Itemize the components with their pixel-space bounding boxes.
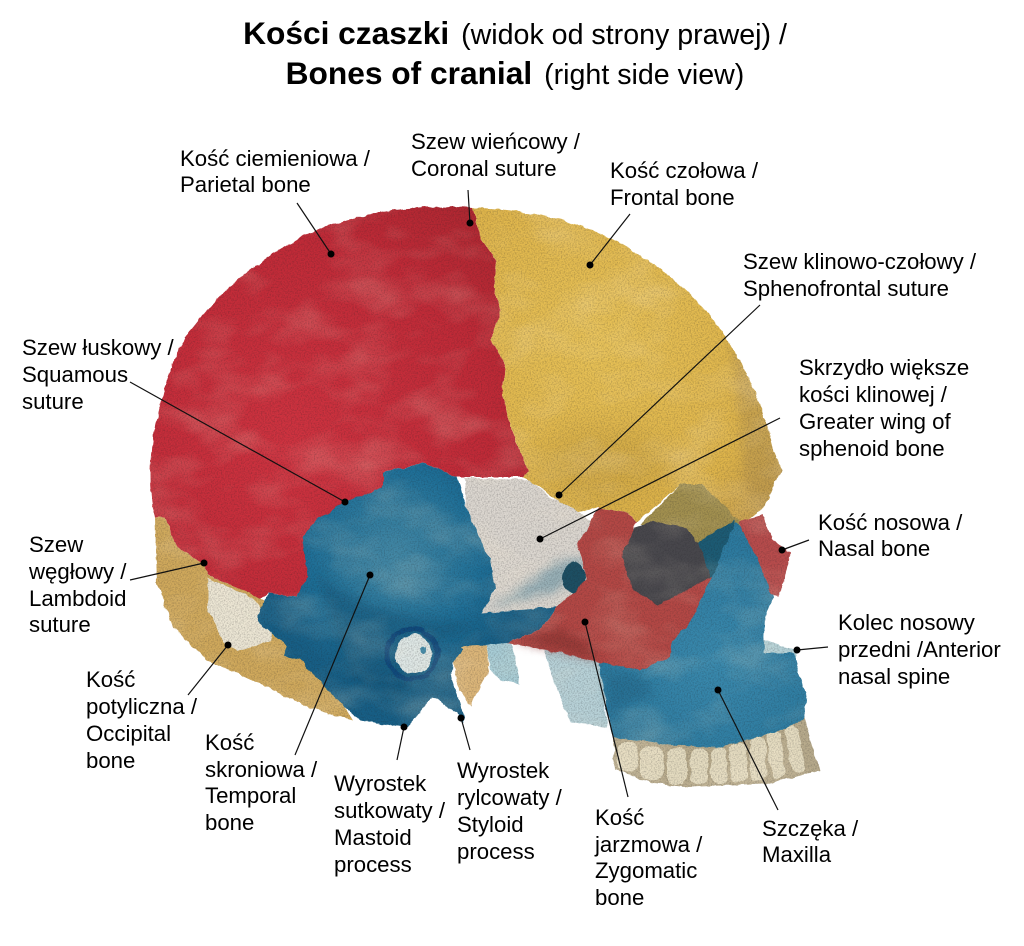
bone: pale pterygoid wedge	[543, 640, 607, 727]
bone: nasal	[738, 515, 790, 597]
label: temporal bone: Kość	[205, 730, 254, 755]
label: squamous suture: Squamous	[22, 362, 128, 387]
bone: parietal	[150, 207, 528, 600]
label: mastoid process: process	[334, 852, 412, 877]
leader: temporal bone	[295, 572, 374, 755]
label: maxilla: Szczęka /	[762, 816, 859, 841]
bone: frontal	[472, 208, 790, 525]
label: zygomatic bone: jarzmowa /	[594, 832, 703, 857]
title: Bones of cranial (right side view)	[286, 55, 744, 91]
bone: occipital	[155, 517, 353, 720]
external acoustic opening	[387, 629, 437, 679]
label: lambdoid suture: Lambdoid	[29, 586, 126, 611]
label: mastoid process: Mastoid	[334, 825, 412, 850]
bone: greater wing of sphenoid	[464, 478, 600, 625]
label: temporal bone: skroniowa /	[205, 757, 318, 782]
label: styloid process: process	[457, 839, 535, 864]
label: greater wing of sphenoid: sphenoid bone	[799, 436, 945, 461]
label: mastoid process: Wyrostek	[334, 771, 427, 796]
leader lines and dots	[130, 190, 828, 810]
leader: zygomatic bone	[582, 618, 628, 797]
nasal spine pale	[755, 637, 797, 665]
leader: parietal bone	[297, 203, 334, 258]
label: anterior nasal spine: przedni /Anterior	[838, 637, 1001, 662]
leader: squamous suture	[130, 382, 348, 506]
orbit upper tan wall	[640, 485, 745, 545]
orbit dark cavity	[610, 521, 720, 620]
leader: frontal bone	[586, 214, 630, 268]
label: nasal bone: Nasal bone	[818, 536, 930, 561]
label: temporal bone: Temporal	[205, 783, 296, 808]
label: lambdoid suture: Szew	[29, 532, 84, 557]
leader: lambdoid suture	[130, 560, 208, 580]
pale plate behind styloid	[485, 635, 520, 685]
tan fragment behind styloid	[450, 640, 489, 705]
title	[243, 15, 787, 91]
leader: greater wing	[536, 418, 780, 542]
title: Kości czaszki (widok od strony prawej) /	[243, 15, 787, 51]
label: parietal bone: Parietal bone	[180, 172, 311, 197]
skull illustration	[150, 207, 820, 787]
leader: mastoid process	[397, 724, 408, 760]
infratemporal dark spot	[562, 563, 586, 593]
label: zygomatic bone: bone	[595, 885, 644, 910]
leader: coronal suture	[466, 190, 474, 226]
bone: maxilla teeth	[613, 715, 820, 787]
orbit medial blue wall	[698, 520, 735, 585]
label: maxilla: Maxilla	[762, 842, 832, 867]
label: anterior nasal spine: Kolec nosowy	[838, 610, 976, 635]
bone: temporal	[257, 463, 557, 728]
label: sphenofrontal suture: Sphenofrontal suture	[743, 276, 949, 301]
label: occipital bone: potyliczna /	[86, 694, 198, 719]
bone: zygomatic	[507, 508, 712, 670]
label: styloid process: rylcowaty /	[457, 785, 563, 810]
label: greater wing of sphenoid: Greater wing of	[799, 409, 952, 434]
label: nasal bone: Kość nosowa /	[818, 510, 963, 535]
label: lambdoid suture: węgłowy /	[28, 559, 127, 584]
bone: maxilla	[597, 522, 807, 747]
label: anterior nasal spine: nasal spine	[838, 664, 950, 689]
leader: sphenofrontal suture	[556, 305, 760, 498]
label: occipital bone: Kość	[86, 667, 135, 692]
label: frontal bone: Kość czołowa /	[610, 158, 759, 183]
leader: maxilla	[714, 686, 778, 810]
label: frontal bone: Frontal bone	[610, 185, 735, 210]
label: parietal bone: Kość ciemieniowa /	[180, 146, 371, 171]
label: lambdoid suture: suture	[29, 612, 91, 637]
label: zygomatic bone: Zygomatic	[595, 858, 697, 883]
label: styloid process: Wyrostek	[457, 758, 550, 783]
label: greater wing of sphenoid: kości klinowej /	[799, 382, 948, 407]
label: greater wing of sphenoid: Skrzydło większe	[799, 355, 969, 380]
leader: nasal bone	[778, 540, 809, 554]
label: mastoid process: sutkowaty /	[334, 798, 446, 823]
leader: styloid process	[458, 714, 470, 750]
label: squamous suture: suture	[22, 389, 84, 414]
label: zygomatic bone: Kość	[595, 805, 644, 830]
label: occipital bone: bone	[86, 748, 135, 773]
label: squamous suture: Szew łuskowy /	[22, 335, 174, 360]
label: temporal bone: bone	[205, 810, 254, 835]
leader: occipital bone	[188, 642, 232, 695]
label: sphenofrontal suture: Szew klinowo-czołowy /	[743, 249, 977, 274]
label: coronal suture: Coronal suture	[411, 156, 557, 181]
leader: anterior nasal spine	[794, 646, 828, 654]
label: styloid process: Styloid	[457, 812, 524, 837]
label: occipital bone: Occipital	[86, 721, 171, 746]
label: coronal suture: Szew wieńcowy /	[411, 129, 581, 154]
